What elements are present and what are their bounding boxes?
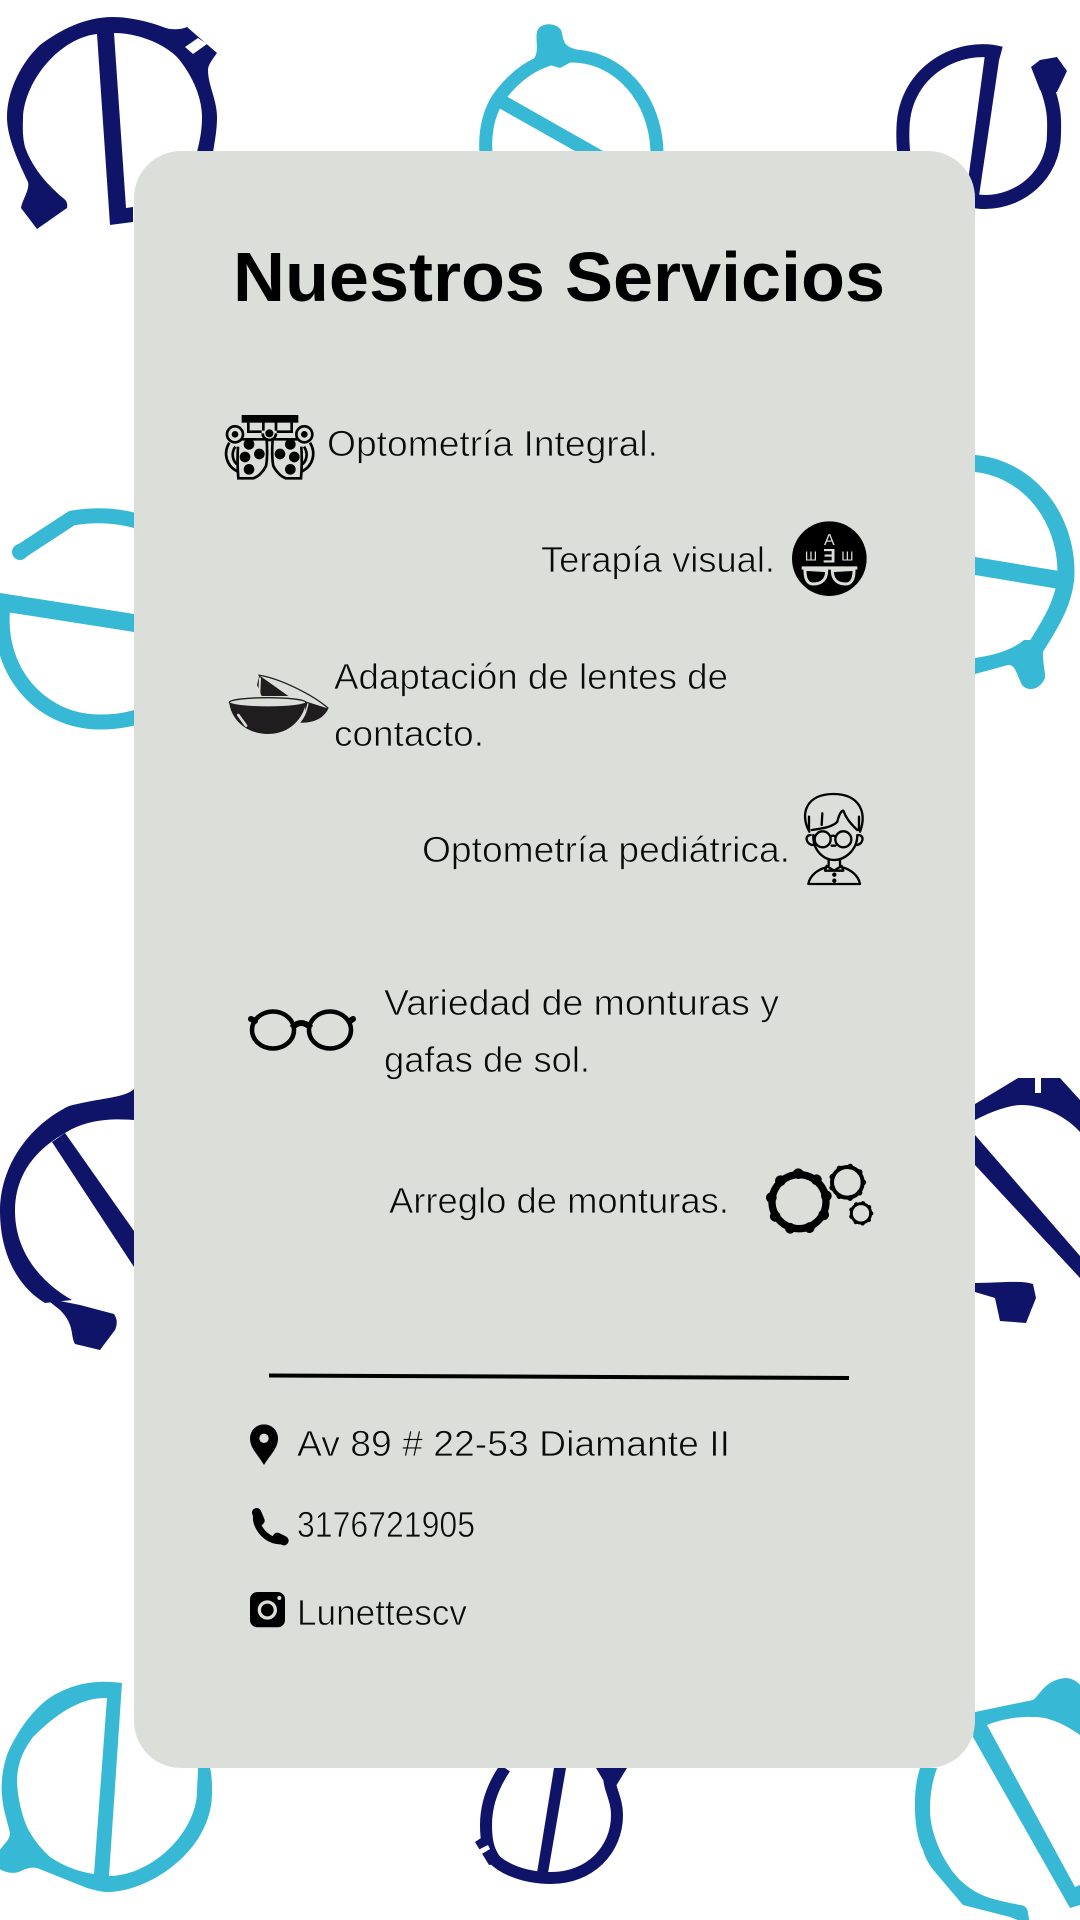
icon: instagram (250, 1592, 285, 1627)
text: Variedad de monturas y gafas de sol (384, 982, 779, 1080)
icon: round glasses (251, 1012, 353, 1048)
icon: phone (256, 1513, 284, 1541)
text: Optometría Integral: Optometría Integral. (327, 423, 658, 464)
title: Nuestros Servicios (233, 238, 885, 316)
background lens: navy lower left (0, 1089, 134, 1350)
icon: gears (766, 1166, 871, 1235)
icon: contact lenses (229, 675, 328, 734)
background lens: cyan top centre (486, 24, 657, 155)
text: address: Av 89 # 22-53 Diamante II (297, 1423, 730, 1464)
icon: eye chart with glasses: Ǝ (823, 547, 836, 568)
text: Adaptación de lentes de contacto (334, 656, 728, 754)
icon: eye chart with glasses: Ш (841, 549, 853, 564)
icon: eye chart with glasses: A (824, 532, 835, 549)
divider line (269, 1376, 849, 1378)
text: instagram handle: Lunettescv (297, 1592, 467, 1633)
background lens: navy bottom centre (475, 1768, 627, 1878)
background lens: navy top left (7, 17, 217, 229)
background lens: cyan middle left (0, 516, 140, 722)
panel: services card (134, 151, 975, 1768)
icon: location pin (250, 1424, 278, 1465)
icon: child with glasses (805, 794, 863, 884)
background lens: navy top right (903, 47, 1067, 202)
text: Adaptación de lentes de contacto: Adaptación de lentes de (334, 656, 728, 697)
text: Arreglo de monturas: Arreglo de monturas. (389, 1180, 729, 1221)
icon: phoropter (226, 415, 313, 478)
icon: eye chart with glasses (792, 521, 867, 596)
background lens: cyan bottom left (0, 1682, 212, 1892)
icon: eye chart with glasses: Ш (805, 549, 817, 564)
text: Variedad de monturas y gafas de sol: Variedad de monturas y (384, 982, 779, 1023)
background lens: cyan middle right (965, 463, 1066, 689)
background lens: cyan bottom right (915, 1678, 1080, 1920)
background lens: navy lower right (975, 1077, 1080, 1323)
text: Terapía visual: Terapía visual. (541, 539, 775, 580)
text: Variedad de monturas y gafas de sol: gafas de sol. (384, 1039, 590, 1080)
text: Optometría pediátrica: Optometría pediátrica. (422, 829, 790, 870)
text: phone number: 3176721905 (297, 1504, 475, 1545)
text: Adaptación de lentes de contacto: contacto. (334, 713, 484, 754)
